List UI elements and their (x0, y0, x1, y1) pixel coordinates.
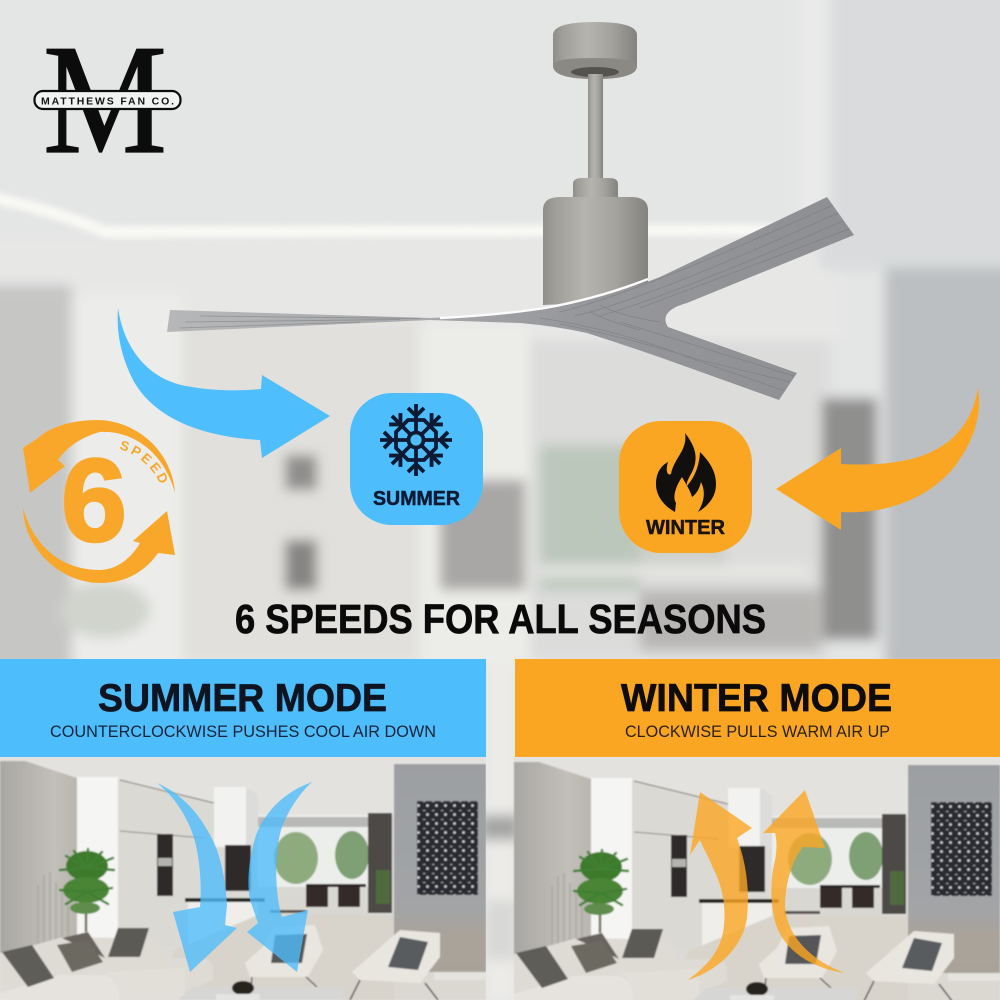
fan blades (167, 197, 854, 400)
arrow: left warm air up (688, 792, 752, 980)
icon: flame (656, 433, 716, 512)
ceiling fan (167, 22, 854, 400)
fan downrod (588, 74, 603, 180)
fan coupling (573, 178, 618, 198)
summer badge label: SUMMER (373, 488, 461, 510)
arrow: right cool air down (247, 782, 312, 972)
summer mode subtitle: COUNTERCLOCKWISE PUSHES COOL AIR DOWN (50, 723, 436, 741)
arrow: left cool air down (157, 783, 237, 972)
winter badge tile (619, 421, 752, 553)
speed label: P (128, 443, 144, 460)
summer mode heading: SUMMER MODE (98, 677, 387, 720)
fan canopy (553, 22, 637, 79)
winter mode subtitle: CLOCKWISE PULLS WARM AIR UP (625, 723, 890, 741)
winter room photo (514, 758, 1000, 1000)
speed label (118, 438, 171, 486)
arrow: blue toward summer badge (118, 308, 330, 458)
fan motor housing (543, 197, 648, 305)
winter badge (619, 421, 752, 553)
winter badge label: WINTER (646, 517, 726, 539)
logo monogram M: M (43, 12, 167, 186)
arrow: lower circular (23, 508, 175, 583)
summer room photo (0, 757, 486, 1000)
speed label: E (138, 450, 155, 467)
summer mode header bar (0, 659, 486, 757)
arrow: orange toward winter badge (776, 388, 979, 530)
summer badge tile (350, 393, 483, 525)
speed label: D (153, 470, 171, 486)
arrow: right warm air up (763, 790, 845, 973)
summer badge (350, 393, 483, 525)
speed label: E (147, 460, 164, 476)
logo: Matthews Fan Co. (34, 12, 180, 186)
numeral 6: 6 (61, 435, 127, 567)
logo name pill: MATTHEWS FAN CO. (41, 96, 174, 108)
winter mode heading: WINTER MODE (621, 677, 892, 720)
panel: summer mode (0, 659, 486, 1000)
main heading: 6 SPEEDS FOR ALL SEASONS (235, 596, 766, 642)
6 speed badge (23, 420, 175, 583)
icon: snowflake (380, 404, 452, 476)
speed label: S (118, 438, 131, 455)
arrow: upper circular (23, 420, 175, 493)
panel: winter mode (514, 659, 1000, 1000)
winter mode header bar (515, 659, 1000, 757)
logo name pill (34, 91, 180, 109)
